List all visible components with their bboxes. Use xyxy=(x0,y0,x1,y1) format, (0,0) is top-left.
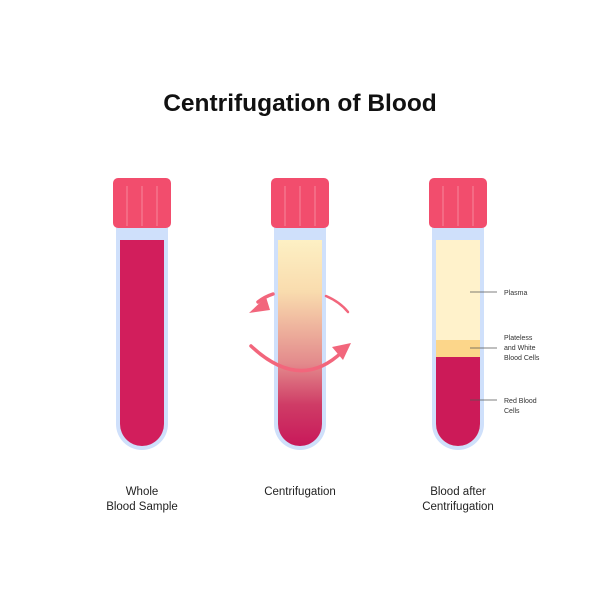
layer labels xyxy=(470,290,540,415)
layer labels: Blood Cells xyxy=(504,355,540,362)
layer labels: Red Blood xyxy=(504,398,537,405)
tube captions: Blood after xyxy=(430,486,486,498)
tube captions xyxy=(106,486,494,513)
layer labels: and White xyxy=(504,345,536,352)
layer labels: Cells xyxy=(504,408,520,415)
tube captions: Blood Sample xyxy=(106,501,178,513)
title: Centrifugation of Blood xyxy=(163,90,437,117)
tube captions: Centrifugation xyxy=(422,501,494,513)
layer labels: Plateless xyxy=(504,335,533,342)
tube 1: whole blood xyxy=(113,178,171,450)
layer labels: Plasma xyxy=(504,290,527,297)
tube 3: separated xyxy=(429,178,487,450)
tube captions: Centrifugation xyxy=(264,486,336,498)
tube captions: Whole xyxy=(126,486,158,498)
tube 2: centrifugation xyxy=(271,178,329,450)
arrows: rotation xyxy=(249,294,351,371)
